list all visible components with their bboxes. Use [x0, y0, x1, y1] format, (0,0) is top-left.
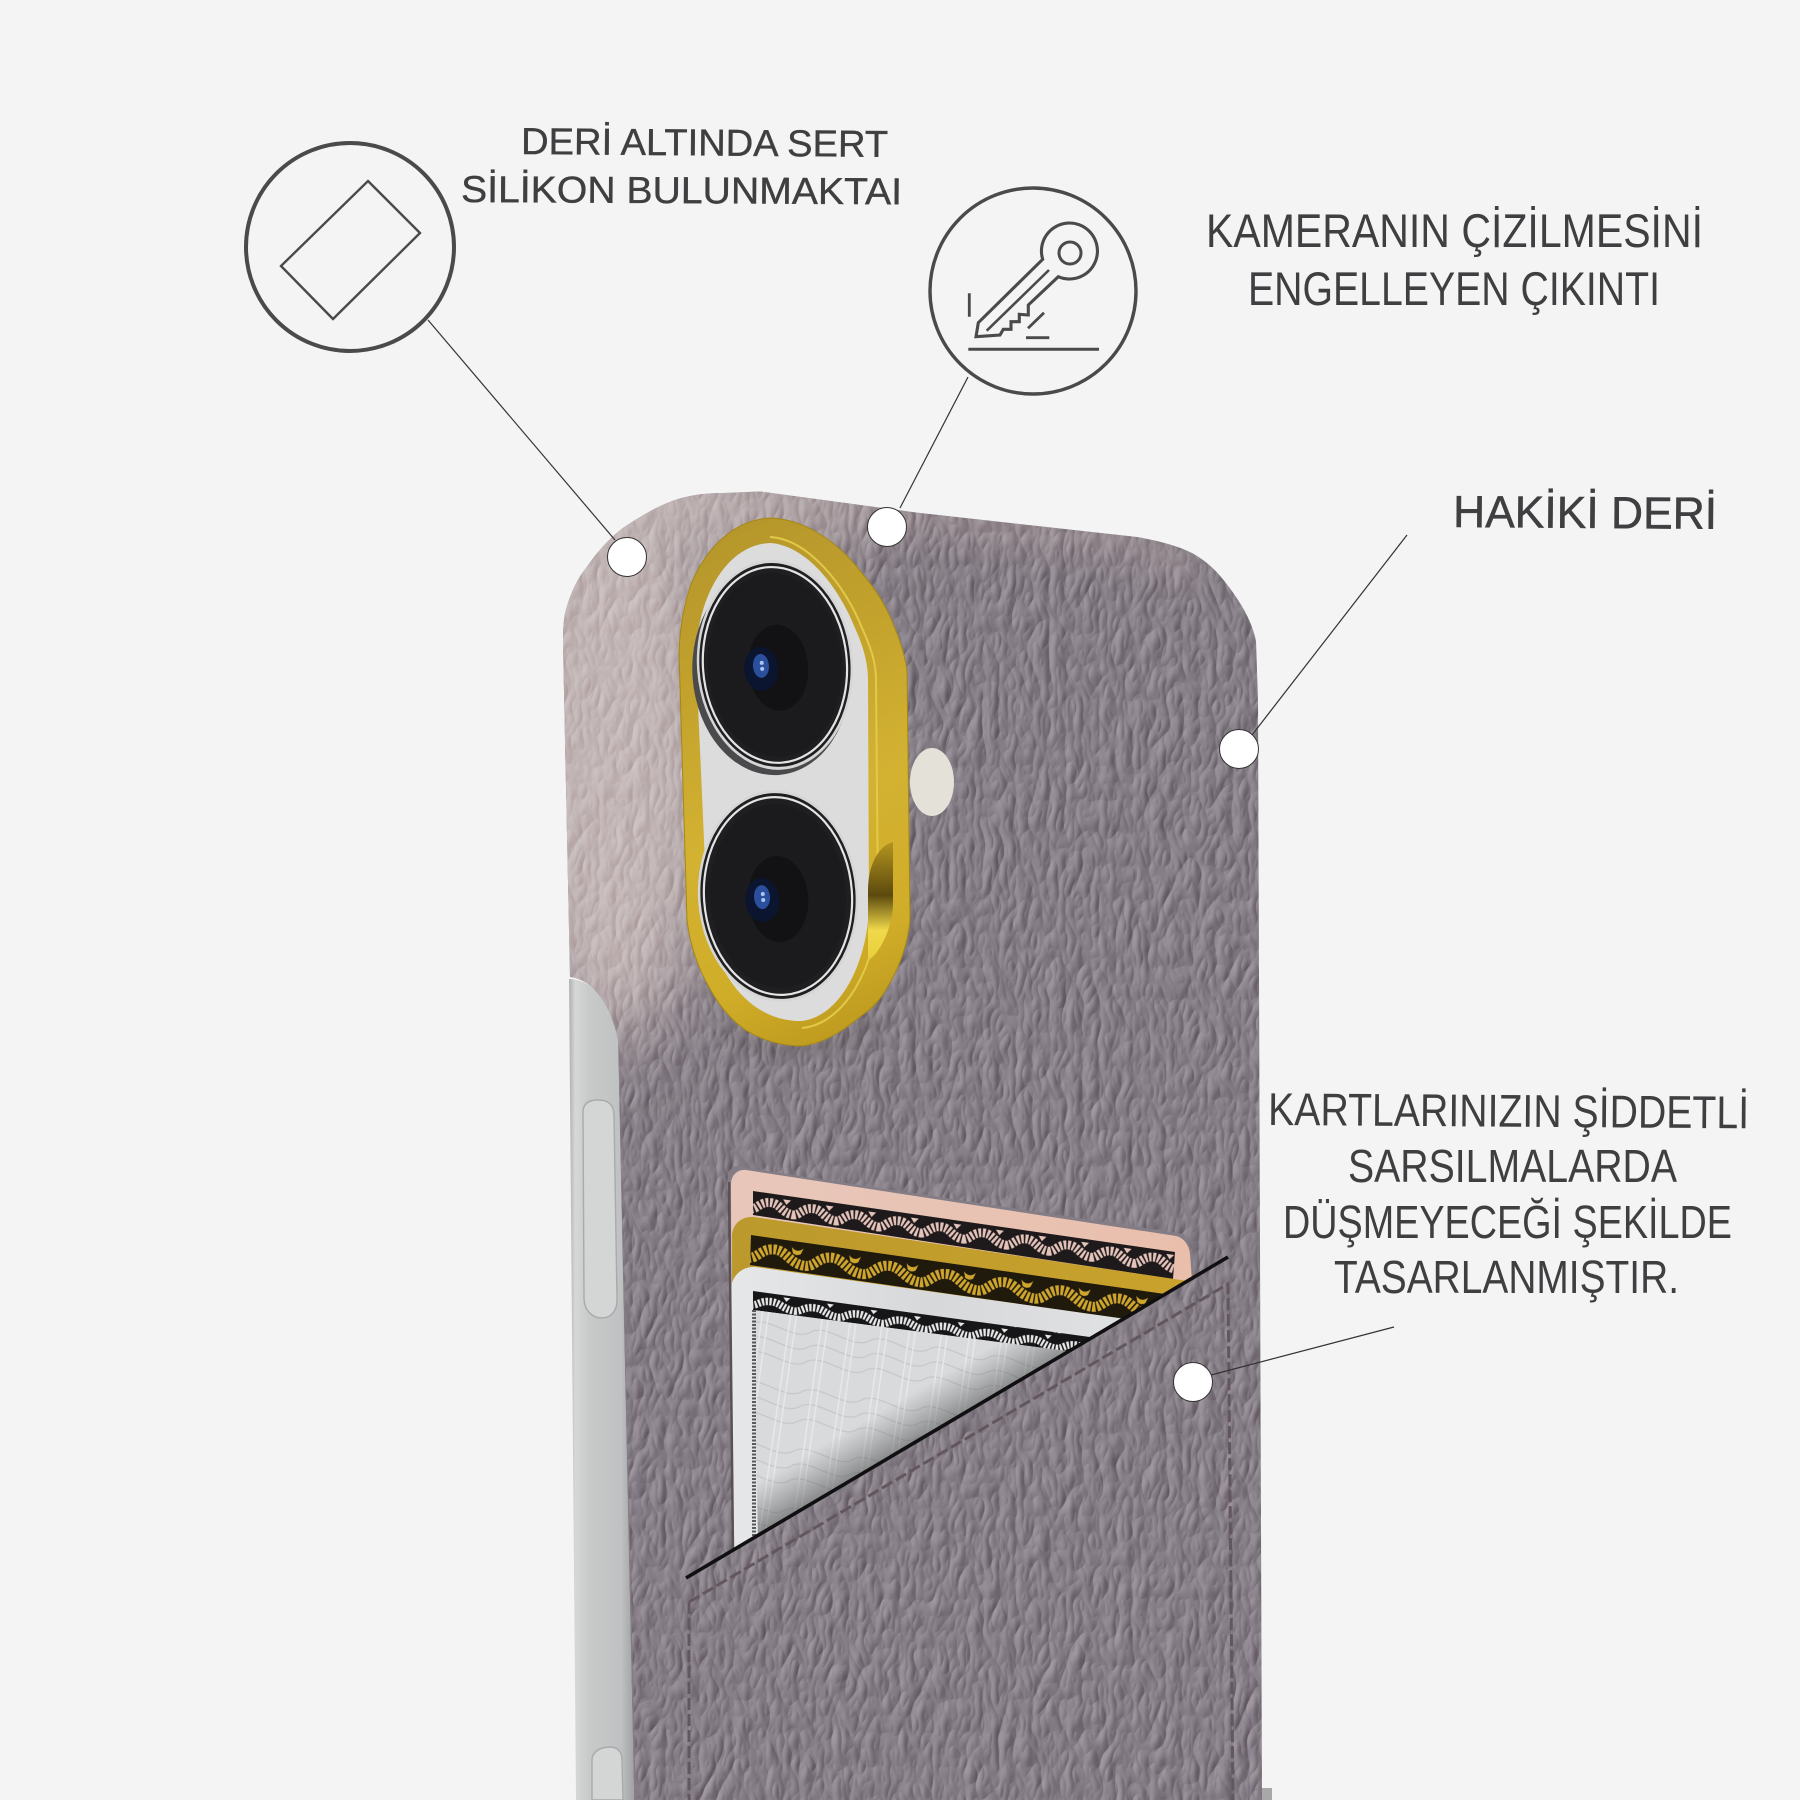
label text: TASARLANMIŞTIR. — [1334, 1251, 1679, 1303]
leather body — [563, 492, 1262, 1800]
callout: genuine leather — [1220, 486, 1717, 768]
leader line — [900, 377, 968, 508]
flash — [910, 748, 954, 816]
lower lens — [691, 785, 865, 1007]
gold camera ring — [679, 518, 910, 1046]
side button upper — [583, 1100, 617, 1318]
pocket slit — [686, 1257, 1228, 1578]
card left shadow — [729, 1182, 733, 1552]
silver phone side frame — [569, 979, 634, 1800]
label text — [461, 120, 902, 212]
label text: ENGELLEYEN ÇIKINTI — [1248, 262, 1660, 315]
label text — [1206, 204, 1703, 315]
phone with leather case — [563, 492, 1272, 1800]
leader line — [1252, 535, 1407, 735]
callout: card pocket — [1174, 1083, 1749, 1402]
marker dot — [868, 508, 906, 546]
marker dot — [1174, 1362, 1212, 1402]
camera island — [679, 518, 954, 1051]
upper lens — [685, 555, 860, 780]
icon: key scratching surface in circle — [930, 188, 1136, 394]
callout: silicone — [246, 120, 902, 577]
label text: HAKİKİ DERİ — [1453, 486, 1717, 539]
icon: silicone card in circle — [246, 143, 454, 351]
angled pocket flap — [686, 1257, 1244, 1800]
bottom case tab — [1258, 1788, 1272, 1800]
gold card — [732, 1217, 1188, 1552]
rose card — [731, 1170, 1192, 1552]
credit cards in pocket — [729, 1170, 1192, 1552]
marker dot — [1220, 730, 1258, 768]
leader line — [428, 320, 615, 540]
ring shadow — [720, 1020, 880, 1051]
label text: DERİ ALTINDA SERT — [521, 120, 888, 165]
infographic — [244, 122, 1746, 1800]
pocket stitching — [689, 1284, 1233, 1800]
ring mirror reflection — [868, 842, 893, 960]
ring inner ridge — [770, 537, 878, 1028]
leader line — [1211, 1327, 1394, 1375]
leather grain texture — [555, 485, 1270, 1800]
side button lower — [592, 1747, 623, 1800]
callout: camera protection — [868, 188, 1703, 546]
silver card — [731, 1267, 1126, 1552]
marker dot — [608, 538, 646, 576]
label text: SARSILMALARDA — [1348, 1140, 1677, 1192]
label text: KAMERANIN ÇİZİLMESİNİ — [1206, 204, 1703, 257]
label text — [1268, 1083, 1749, 1303]
white camera plate — [696, 543, 869, 1021]
leather highlights on curved edge — [507, 440, 1200, 1040]
label text: SİLİKON BULUNMAKTAI — [461, 168, 902, 212]
